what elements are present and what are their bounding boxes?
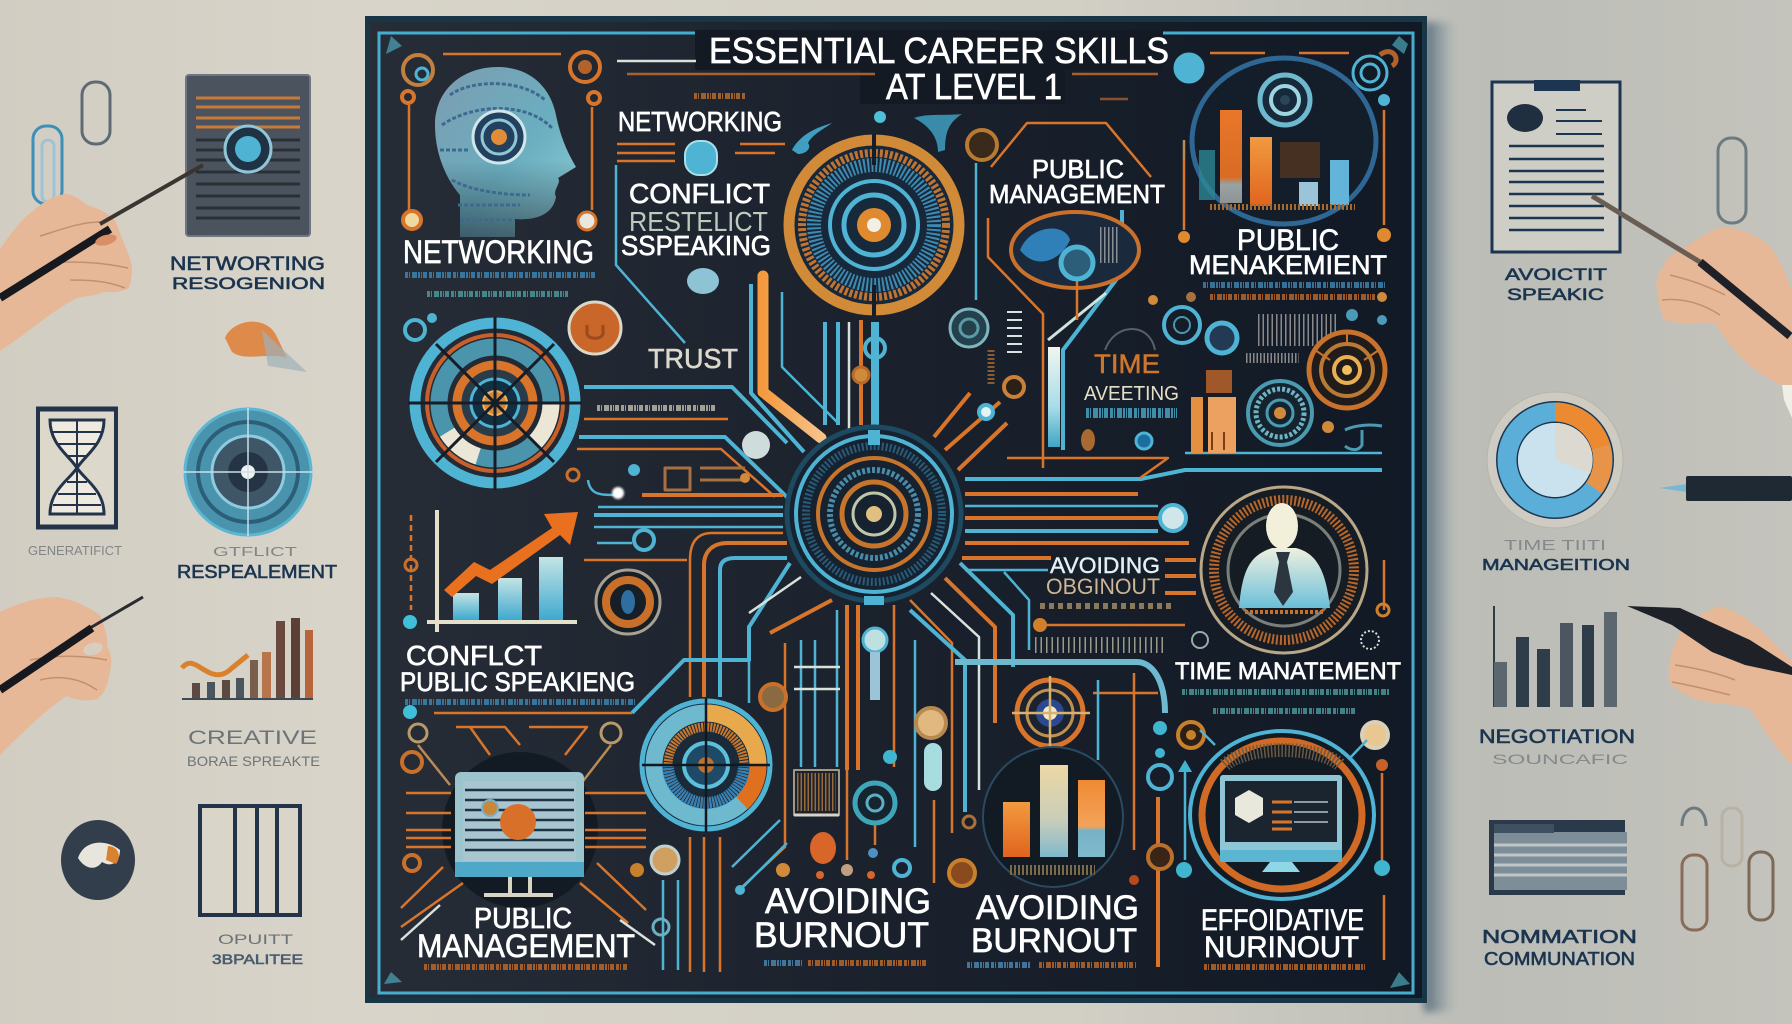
- label: networking second: NETWORKING: [618, 106, 782, 137]
- board frame: [365, 16, 1427, 1003]
- board drop shadow: [1424, 22, 1458, 1012]
- label: conflict resolution: GTFLICT: [213, 544, 297, 559]
- label: avoiding burnout second: [967, 889, 1139, 965]
- icons: rings around the head: [402, 52, 600, 230]
- label: time management sidebar: MANAGEITION: [1482, 557, 1630, 574]
- title: [695, 30, 1169, 107]
- icon: orange blob: [225, 322, 307, 372]
- label: effoidative nurinout: [1201, 904, 1366, 967]
- illustration: left hand lower: [0, 597, 143, 755]
- label: time averting: [1084, 329, 1179, 413]
- label: avoiding burnout second: AVOIDING: [976, 889, 1139, 927]
- panel: public management diagram: PUBLIC: [1032, 154, 1124, 184]
- icon: person portrait circle: [1201, 487, 1367, 653]
- label: public management: [417, 903, 635, 967]
- panel: bottom center nodes: [760, 628, 975, 886]
- icon: light pillar: [1048, 347, 1060, 447]
- icon: table: [200, 806, 300, 915]
- icon: document: [1492, 80, 1620, 252]
- chart: three bar circle: [983, 747, 1123, 887]
- chart: crosshair ring: [1012, 676, 1090, 752]
- label: quality: OPUITT: [218, 931, 294, 947]
- label: time management: TIME MANATEMENT: [1175, 658, 1401, 685]
- icon: pen horizontal: [1659, 476, 1792, 501]
- icons: paper clips bottom right: [1682, 808, 1773, 930]
- illustration: left hand with pen: [0, 165, 203, 351]
- label: avoiding burnout first: BURNOUT: [754, 916, 929, 955]
- panel: right sidebar: [1479, 80, 1792, 969]
- panel: main dark board: [365, 16, 1427, 1003]
- icon: glowing bottles: [1081, 370, 1236, 453]
- title: AT LEVEL 1: [886, 66, 1062, 107]
- title: ESSENTIAL CAREER SKILLS: [709, 30, 1169, 71]
- heading: networking resogenion: [170, 254, 325, 293]
- chart: donut pie: [1487, 392, 1623, 528]
- decorative circuit row: [1033, 606, 1208, 648]
- icon: hourglass: [36, 409, 118, 527]
- label: conflict public speaking: [400, 640, 635, 719]
- icon chain right of person: [1361, 560, 1389, 649]
- label: trust: TRUST: [648, 343, 738, 374]
- panel: left sidebar: [0, 75, 337, 967]
- panel: public management diagram: MANAGEMENT: [989, 179, 1165, 209]
- chart: segmented pie wheel: [642, 698, 770, 832]
- label: public menakemient: [1189, 224, 1387, 297]
- label: nomination communication: [1482, 927, 1637, 969]
- label: avoiding speaking: SPEAKIC: [1507, 285, 1604, 304]
- chart: grey bars: [1493, 606, 1617, 707]
- label: public management: MANAGEMENT: [417, 928, 635, 964]
- label: creative: [187, 728, 320, 769]
- label: public menakemient: MENAKEMIENT: [1189, 250, 1387, 280]
- label: avoiding burnout small: OBGINOUT: [1046, 574, 1160, 599]
- label: creative: CREATIVE: [188, 728, 317, 749]
- label: conflict public speaking: CONFLCT: [406, 640, 542, 671]
- chart: center hub wheel: [787, 427, 961, 605]
- icon: brain head profile: [435, 67, 576, 237]
- icon: paper clips left: [33, 82, 110, 204]
- label: avoiding burnout first: [754, 882, 931, 963]
- label: faded caption: GENERATIFICT: [28, 543, 122, 558]
- label: conflict resolution: RESPEALEMENT: [177, 562, 337, 582]
- icons: top right rings: [1175, 52, 1396, 302]
- label: avoiding burnout first: AVOIDING: [765, 882, 931, 921]
- icon: pale blue shape: [687, 268, 719, 294]
- icon: dark badge: [61, 820, 135, 900]
- label: effoidative nurinout: NURINOUT: [1204, 931, 1359, 964]
- label: time management sidebar: TIME TIITI: [1504, 537, 1606, 554]
- icons: monitor satellites: [1176, 722, 1390, 878]
- label: avoiding burnout second: BURNOUT: [971, 922, 1137, 960]
- chart: growth bars with arrow: [427, 510, 578, 632]
- label: public management: PUBLIC: [474, 903, 572, 935]
- icon: blue wheel: [183, 408, 313, 536]
- panel: center right stripes and rings: [950, 292, 1387, 419]
- label: conflict public speaking: PUBLIC SPEAKIENG: [400, 667, 635, 697]
- label: avoiding speaking: [1505, 265, 1607, 304]
- label: quality: 3BPALITEE: [212, 951, 303, 967]
- icons: node column: [1129, 721, 1172, 885]
- icon: small cyan ring: [405, 313, 437, 340]
- label: conflict resolution: [177, 544, 337, 582]
- icon: cyan pill: [685, 96, 745, 175]
- label: time averting: TIME: [1094, 349, 1160, 379]
- icon: tablet: [186, 75, 310, 236]
- icon: monitor circle: [1190, 731, 1374, 899]
- label: public menakemient: PUBLIC: [1237, 224, 1339, 257]
- heading: networking resogenion: RESOGENION: [172, 274, 325, 293]
- label: creative: BORAE SPREAKTE: [187, 753, 320, 769]
- label: conflict resolution speaking: SSPEAKING: [621, 230, 771, 261]
- label: networking: NETWORKING: [403, 234, 594, 270]
- icon: monitor with rays: [401, 723, 679, 945]
- label: avoiding burnout small: [1046, 553, 1160, 599]
- label: negotiation: SOUNCAFIC: [1492, 751, 1628, 767]
- label: negotiation: [1479, 727, 1635, 767]
- label: avoiding burnout small: AVOIDING: [1050, 553, 1160, 578]
- icon: small node circles: [567, 338, 1186, 531]
- label: conflict resolution speaking: CONFLICT: [629, 178, 770, 209]
- label: negotiation: NEGOTIATION: [1479, 727, 1635, 748]
- label: conflict resolution speaking: [621, 178, 771, 261]
- chart: teal wheel right: [1248, 381, 1382, 450]
- network circuit lines: [409, 53, 1384, 972]
- chart: large top wheel: [789, 134, 959, 316]
- icon: paper clip right top: [1718, 138, 1746, 223]
- label: avoiding speaking: AVOICTIT: [1505, 265, 1607, 284]
- icons: small top shapes: [792, 111, 997, 160]
- panel: public management diagram: [989, 154, 1165, 320]
- label: effoidative nurinout: EFFOIDATIVE: [1201, 904, 1364, 937]
- label: quality: [212, 931, 303, 967]
- chart: small bars: [182, 618, 313, 699]
- illustration: right hand top: [1592, 196, 1792, 418]
- label: time averting: AVEETING: [1084, 383, 1179, 405]
- chart: orange wheel right: [1309, 332, 1385, 408]
- chart: target wheel left: [408, 317, 582, 490]
- icon: folder card: [1489, 820, 1627, 895]
- label: conflict resolution speaking: RESTELICT: [629, 206, 768, 237]
- label: nomination communication: COMMUNATION: [1484, 949, 1635, 969]
- label: nomination communication: NOMMATION: [1482, 927, 1637, 947]
- chart: bar chart circle top right: [1192, 58, 1376, 224]
- heading: networking resogenion: NETWORTING: [170, 254, 325, 275]
- illustration: right hand lower: [1627, 606, 1792, 764]
- icons: left chain beside growth chart: [403, 515, 660, 634]
- label: time management sidebar: [1482, 537, 1630, 574]
- icon: orange button: [569, 302, 621, 354]
